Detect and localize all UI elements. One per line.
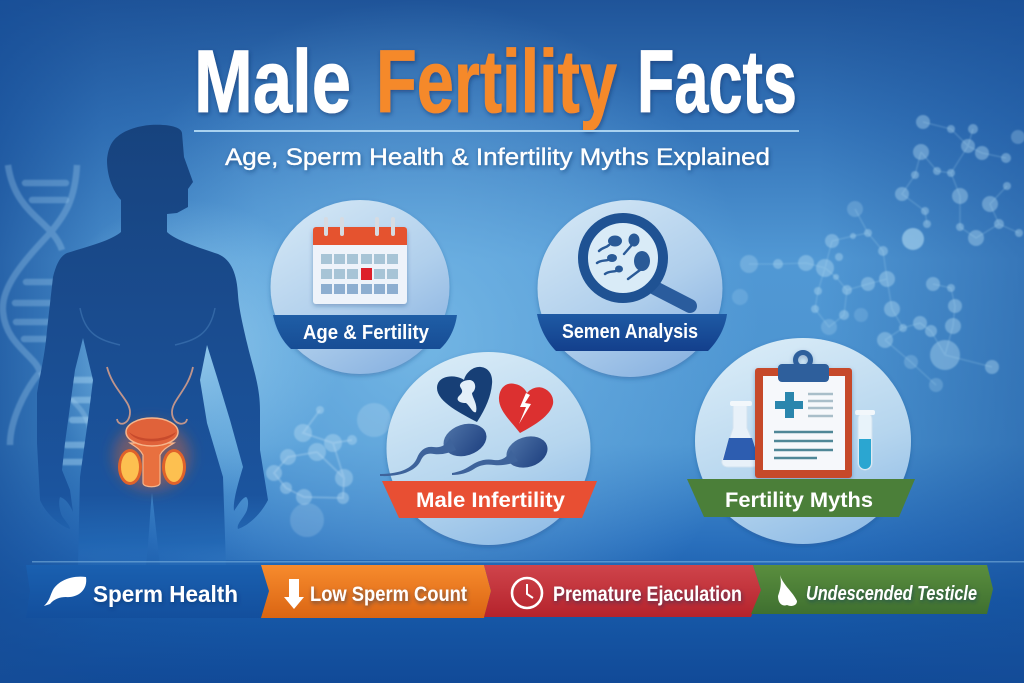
panel: male infertility — [380, 352, 597, 545]
label band: fertility myths: Fertility Myths — [725, 489, 873, 512]
icon: drop shape — [778, 575, 797, 606]
ribbon: low sperm count: Low Sperm Count — [310, 583, 467, 606]
label band: male infertility: Male Infertility — [416, 489, 565, 512]
organ glow — [114, 422, 190, 490]
label band: semen analysis — [537, 314, 727, 351]
ribbon: low sperm count — [261, 565, 491, 618]
title: Male — [194, 31, 351, 131]
label band: age and fertility: Age & Fertility — [303, 322, 430, 344]
right testicle — [162, 449, 186, 485]
title: Facts — [637, 31, 797, 131]
icon: red broken heart — [499, 384, 553, 433]
icon: sperm — [44, 577, 86, 606]
title: Fertility — [376, 31, 617, 131]
icon: down arrow — [284, 579, 304, 609]
molecule network right — [732, 115, 1024, 392]
bladder — [126, 418, 178, 446]
label band: fertility myths — [687, 479, 915, 517]
panel: semen analysis — [537, 200, 727, 377]
icon: clipboard — [755, 352, 852, 478]
shaft — [130, 443, 174, 487]
title divider — [194, 130, 799, 132]
icon: clock — [512, 578, 542, 608]
male silhouette with reproductive organs — [37, 125, 268, 565]
label band: age and fertility — [273, 315, 457, 349]
ducts — [107, 367, 193, 424]
icon: flask — [722, 401, 760, 467]
ribbon: undescended testicle: Undescended Testicle — [806, 583, 977, 605]
icon: dark broken heart — [437, 367, 492, 422]
icon: test tube — [855, 410, 875, 470]
ribbon: sperm health: Sperm Health — [93, 581, 238, 607]
icon: magnifying glass with sperm — [583, 218, 690, 306]
icon: calendar — [313, 219, 407, 304]
ribbon: premature ejaculation — [484, 565, 761, 617]
DNA helix decoration — [3, 165, 94, 462]
subtitle: Age, Sperm Health & Infertility Myths Explained — [225, 144, 770, 171]
silhouette body — [37, 125, 268, 565]
label band: semen analysis: Semen Analysis — [562, 321, 698, 343]
label band: male infertility — [382, 481, 597, 518]
left testicle — [118, 449, 142, 485]
panel: age and fertility — [270, 200, 457, 374]
ribbon: premature ejaculation: Premature Ejaculation — [553, 583, 742, 606]
panel: fertility myths — [687, 338, 915, 544]
title — [194, 31, 797, 131]
ribbon: sperm health — [26, 565, 269, 618]
icon: sperm cells — [380, 418, 552, 476]
ribbon divider — [32, 561, 1024, 562]
molecule network left — [266, 403, 391, 537]
ribbon: undescended testicle — [751, 565, 993, 614]
bottom ribbon — [26, 565, 993, 618]
